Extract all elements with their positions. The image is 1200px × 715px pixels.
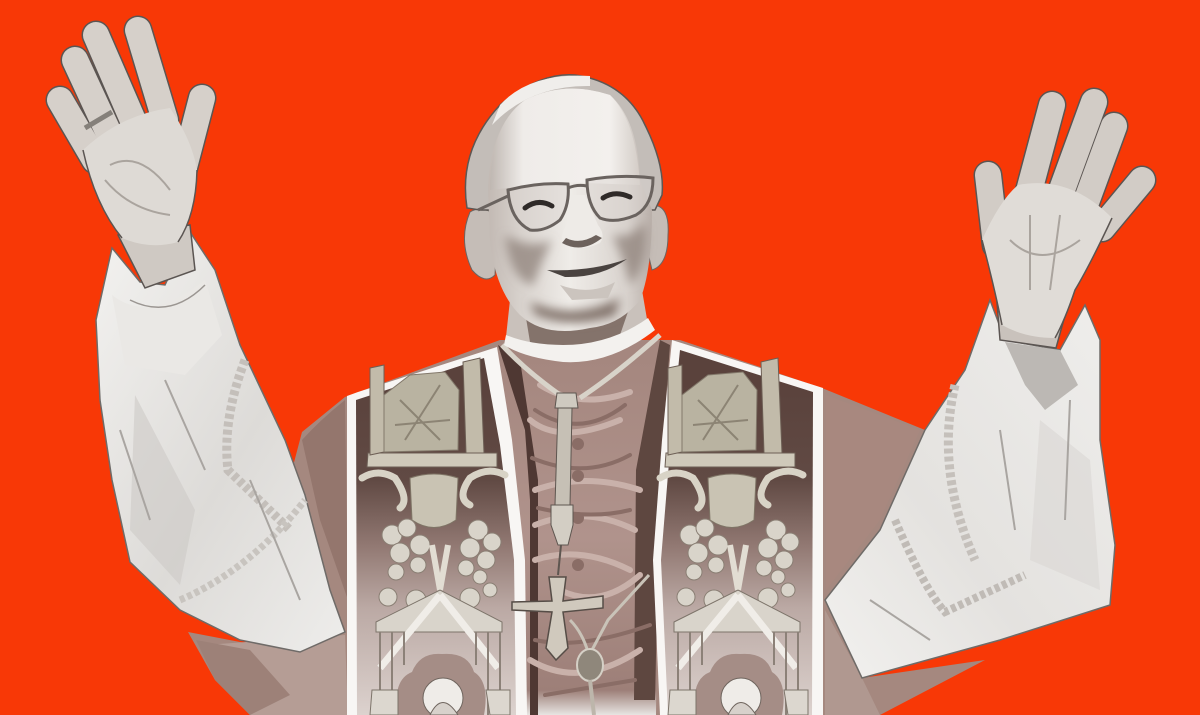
mouth xyxy=(547,259,627,277)
eyes xyxy=(525,194,630,208)
cheek shading xyxy=(505,222,646,322)
panel: right stole xyxy=(653,340,823,715)
icon: right raised hand xyxy=(982,102,1142,348)
panel: centre cassock xyxy=(498,340,670,715)
icon: pectoral cross and cord xyxy=(502,335,660,715)
icon: left raised hand xyxy=(60,30,202,288)
panel: cassock body xyxy=(188,340,985,715)
panel: left sleeve xyxy=(96,232,345,652)
face xyxy=(488,89,652,331)
panel: neck and collar xyxy=(504,290,655,362)
panel: right sleeve xyxy=(825,300,1115,678)
panel: head xyxy=(464,75,668,331)
hair xyxy=(465,75,662,210)
panel: left stole xyxy=(347,347,527,715)
nose xyxy=(562,195,603,248)
glasses xyxy=(478,176,653,230)
ears xyxy=(464,209,498,279)
